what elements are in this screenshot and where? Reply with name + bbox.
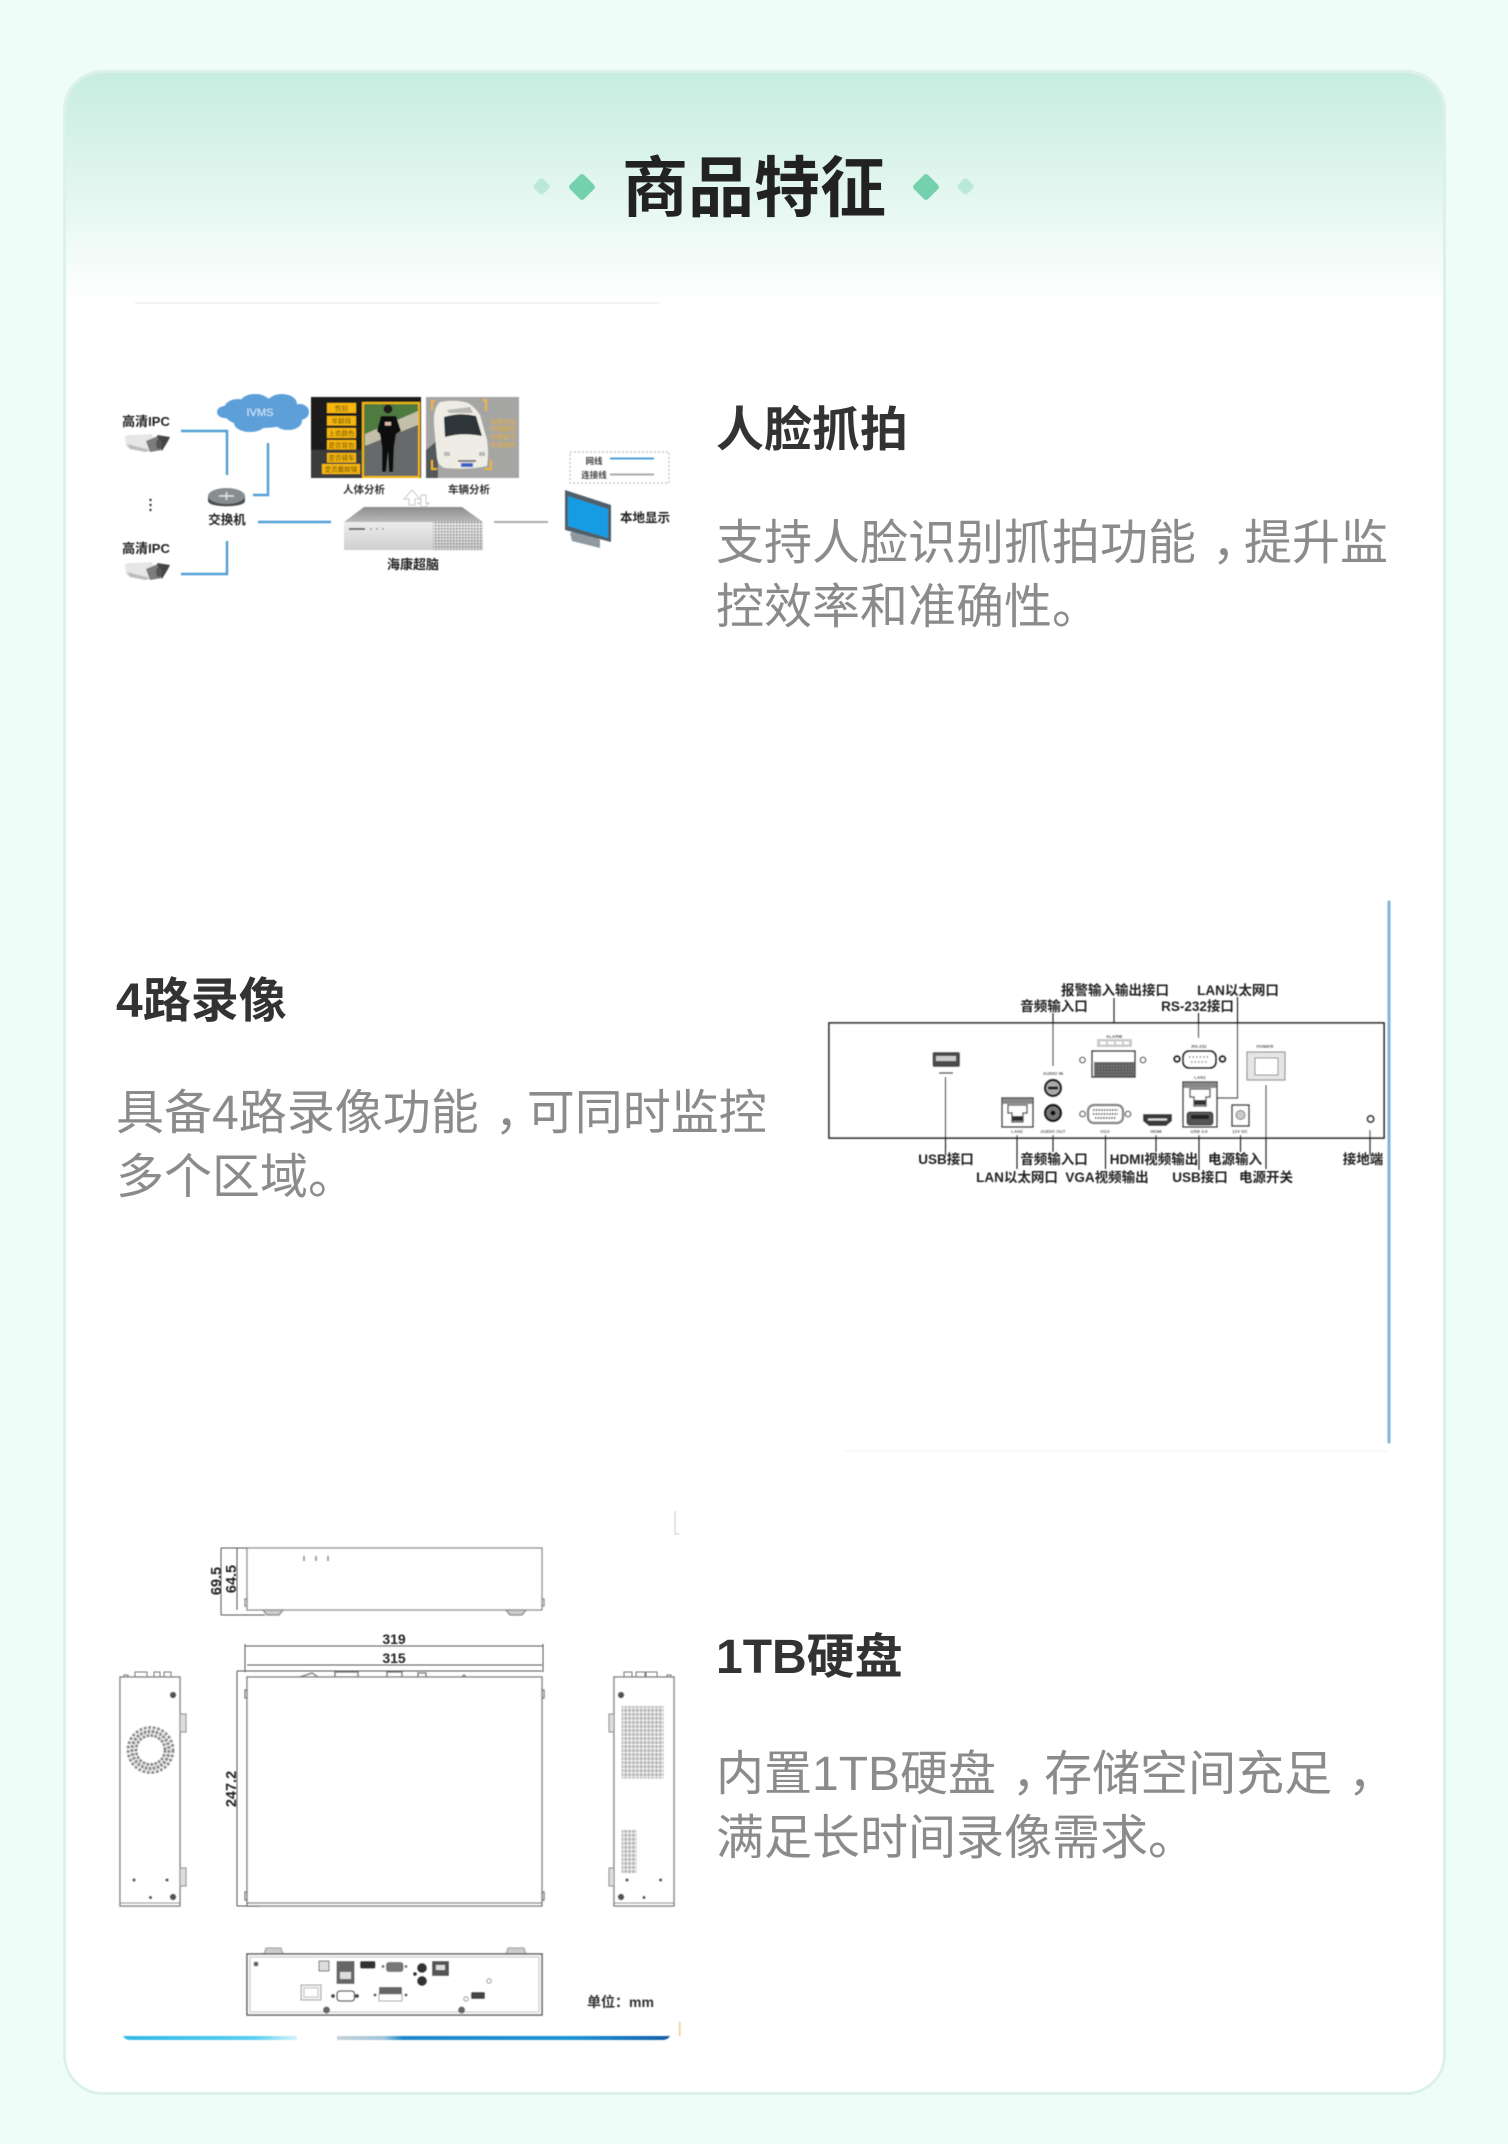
- callout labels: LAN以太网口: [976, 1170, 1058, 1185]
- small port labels: 12V DC: [1232, 1129, 1249, 1134]
- callout labels: HDMI视频输出: [1110, 1151, 1198, 1167]
- callout labels: RS-232接口: [1161, 999, 1234, 1014]
- label: camera bottom: 高清IPC: [122, 541, 170, 556]
- port: alarm: [1080, 1034, 1146, 1077]
- text: recording description: 多个区域。: [116, 1151, 356, 1204]
- small port labels: USB 3.0: [1190, 1129, 1208, 1134]
- image edge line: [1388, 902, 1390, 1442]
- label: camera top: 高清IPC: [122, 414, 170, 429]
- callout labels: 报警输入输出接口: [1061, 982, 1169, 998]
- text: disk description: 内置1TB硬盘 ，存储空间充足 ，: [716, 1748, 1396, 1801]
- port: power switch: [1247, 1044, 1285, 1080]
- rear panel outline: [829, 1023, 1384, 1138]
- port: alarm: ALARM: [1106, 1034, 1122, 1039]
- callout labels: [918, 982, 1383, 1185]
- label: unit: 单位：mm: [587, 1994, 654, 2010]
- photo: vehicle analysis: 车辆型号: [490, 432, 516, 441]
- photo: person analysis: [311, 397, 421, 478]
- photo: person analysis: 上衣颜色: [328, 428, 355, 438]
- port: RS-232: RS-232: [1191, 1044, 1207, 1049]
- small port labels: AUDIO OUT: [1040, 1129, 1066, 1134]
- dots: [149, 499, 152, 511]
- image bottom edge bar: [123, 2022, 680, 2040]
- icon: server: [344, 507, 483, 550]
- width dimensions: 315: [382, 1650, 406, 1666]
- icon: monitor: [565, 490, 611, 548]
- photo: person analysis: 是否背包: [328, 440, 355, 450]
- port: audio: [1043, 1071, 1063, 1121]
- connection lines: [181, 431, 331, 574]
- title decoration: right diamonds: [913, 174, 974, 200]
- port: LAN1 and USB 3.0: [1183, 1075, 1217, 1127]
- port: power input: [1232, 1105, 1249, 1126]
- label: server: 海康超脑: [387, 557, 439, 572]
- callout labels: USB接口: [918, 1152, 974, 1167]
- callout labels: USB接口: [1172, 1170, 1228, 1185]
- diagram: rear panel interfaces: [829, 902, 1389, 1451]
- diagram: system topology: [122, 303, 670, 580]
- small port labels: [1011, 1129, 1249, 1134]
- photo: person analysis: 是否骑车: [328, 453, 355, 462]
- icon: cloud IVMS: [217, 394, 309, 432]
- text: face capture description: [716, 517, 1388, 634]
- label: vehicle analysis: 车辆分析: [448, 483, 490, 496]
- photo: person analysis: 是否戴眼镜: [325, 464, 358, 474]
- legend: 连接线: [581, 470, 607, 480]
- depth dimension: 247.2: [224, 1771, 240, 1807]
- small port labels: LAN2: [1011, 1129, 1023, 1134]
- width dimensions: [245, 1631, 543, 1672]
- icon: data arrows: [404, 490, 429, 508]
- corner mark: [675, 1511, 679, 1534]
- left side view: [120, 1672, 186, 1906]
- port: power switch: POWER: [1256, 1044, 1274, 1049]
- callout labels: 音频输入口: [1020, 998, 1088, 1014]
- link to local display: [494, 521, 548, 523]
- icon: cloud IVMS: IVMS: [247, 407, 273, 419]
- callout labels: 音频输入口: [1020, 1151, 1088, 1167]
- callout labels: 接地端: [1343, 1151, 1383, 1167]
- photo: vehicle analysis: 车牌颜色: [490, 424, 516, 433]
- height dimensions: 64.5: [224, 1565, 240, 1593]
- text: face capture description: 支持人脸识别抓拍功能 ，提升监: [716, 517, 1388, 570]
- port: HDMI: [1143, 1114, 1172, 1126]
- callout labels: 电源输入: [1208, 1151, 1262, 1167]
- label: local display: 本地显示: [620, 510, 670, 525]
- port: USB: [932, 1052, 960, 1073]
- depth dimension: [224, 1671, 542, 1906]
- text: recording description: [116, 1087, 767, 1204]
- label: person analysis: 人体分析: [343, 483, 385, 496]
- diagram: dimension drawing: [120, 1511, 680, 2040]
- small port labels: VGA: [1100, 1129, 1111, 1134]
- photo: person analysis: 性别: [335, 404, 348, 412]
- port: VGA: [1080, 1105, 1131, 1123]
- heading: 1TB disk: 1TB硬盘: [716, 1631, 903, 1684]
- text: disk description: [716, 1748, 1396, 1865]
- port: RS-232: [1174, 1044, 1225, 1068]
- title decoration: left diamonds: [534, 174, 595, 200]
- text: face capture description: 控效率和准确性。: [716, 581, 1100, 634]
- heading: 4 channel recording: 4路录像: [116, 975, 287, 1028]
- port: ground: [1367, 1116, 1374, 1122]
- text: recording description: 具备4路录像功能 ，可同时监控: [116, 1087, 767, 1140]
- title: 商品特征: [622, 151, 886, 225]
- legend: 网线: [585, 456, 603, 466]
- callout labels: LAN以太网口: [1197, 983, 1279, 998]
- legend: [570, 452, 669, 483]
- icon: camera top: [125, 434, 170, 452]
- port: audio: AUDIO IN: [1043, 1071, 1063, 1076]
- photo: person analysis: 年龄段: [332, 416, 352, 425]
- height dimensions: 69.5: [209, 1567, 225, 1595]
- width dimensions: 319: [382, 1631, 406, 1647]
- top view: [245, 1672, 544, 1906]
- photo: vehicle analysis: 车身颜色: [490, 440, 516, 449]
- photo: vehicle analysis: [426, 397, 519, 478]
- label: switch: 交换机: [208, 512, 246, 527]
- icon: camera bottom: [125, 562, 170, 580]
- port: LAN2: [1002, 1098, 1033, 1127]
- front view: [245, 1548, 544, 1615]
- callout labels: VGA视频输出: [1065, 1169, 1149, 1185]
- text: disk description: 满足长时间录像需求。: [716, 1812, 1196, 1865]
- photo: vehicle analysis: 车牌号码: [490, 417, 516, 426]
- height dimensions: [209, 1548, 265, 1615]
- icon: switch: [208, 488, 245, 506]
- right side view: [609, 1672, 674, 1906]
- port: LAN1 and USB 3.0: LAN1: [1194, 1075, 1206, 1080]
- callout lines: [946, 997, 1370, 1170]
- rear view: [247, 1948, 542, 2015]
- callout labels: 电源开关: [1239, 1169, 1293, 1185]
- heading: face capture: 人脸抓拍: [716, 404, 908, 457]
- small port labels: HDMI: [1150, 1129, 1162, 1134]
